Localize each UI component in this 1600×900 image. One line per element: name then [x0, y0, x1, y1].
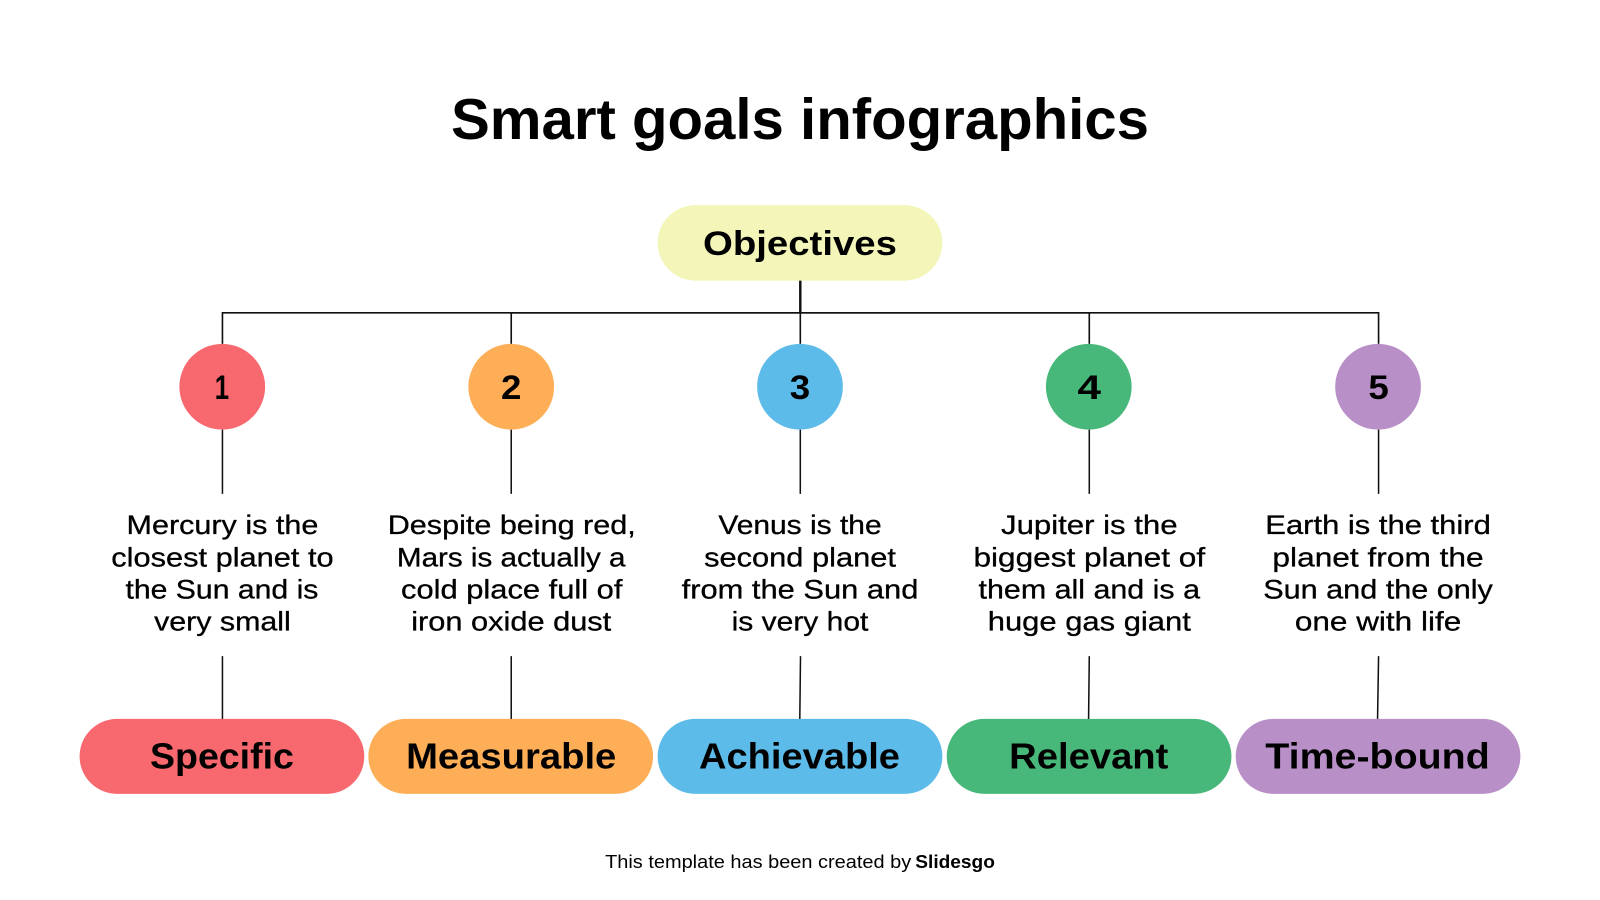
description 3: from the Sun and [682, 574, 918, 604]
description 4 [973, 510, 1206, 637]
description 3 [682, 510, 918, 637]
footer credit: This template has been created by [605, 851, 912, 872]
description 2 [388, 510, 636, 637]
number circle 4 [1046, 344, 1132, 430]
description 5: Sun and the only [1263, 574, 1493, 604]
description 2: cold place full of [401, 574, 623, 604]
description 1: very small [154, 607, 291, 637]
pill: specific: Specific [150, 735, 294, 776]
description 4: Jupiter is the [1001, 510, 1178, 540]
description 4: huge gas giant [988, 607, 1191, 637]
description 5: planet from the [1272, 542, 1484, 572]
pill: time-bound: Time-bound [1265, 735, 1490, 776]
number circle 3: 3 [790, 369, 810, 407]
description 5: one with life [1295, 607, 1461, 637]
pill: relevant: Relevant [1009, 735, 1168, 776]
connector lines 4 [1088, 430, 1090, 719]
column 3: achievable [658, 344, 942, 794]
connector lines 2 [510, 430, 512, 719]
description 3: Venus is the [718, 510, 882, 540]
title: Smart goals infographics [451, 88, 1149, 152]
description 1: the Sun and is [126, 574, 318, 604]
number circle 4: 4 [1078, 369, 1102, 407]
number circle 1: 1 [215, 369, 229, 407]
pill: specific [80, 719, 364, 794]
objectives pill: Objectives [703, 225, 897, 263]
description 2: Despite being red, [388, 510, 636, 540]
objectives pill [658, 205, 942, 281]
column 2: measurable [368, 344, 653, 794]
number circle 1 [179, 344, 265, 430]
description 5: Earth is the third [1265, 510, 1491, 540]
description 2: iron oxide dust [411, 607, 612, 637]
pill: time-bound [1236, 719, 1520, 794]
pill: measurable [368, 719, 653, 794]
description 1 [111, 510, 334, 637]
description 2: Mars is actually a [397, 542, 627, 572]
connector: trunk and horizontal bar [222, 281, 1379, 344]
column 5: time-bound [1236, 344, 1520, 794]
pill: achievable: Achievable [699, 735, 900, 776]
description 4: biggest planet of [973, 542, 1206, 572]
description 4: them all and is a [979, 574, 1201, 604]
description 3: second planet [704, 542, 896, 572]
description 1: closest planet to [111, 542, 334, 572]
number circle 2 [468, 344, 554, 430]
description 1: Mercury is the [127, 510, 318, 540]
number circle 5: 5 [1368, 369, 1389, 407]
column 1: specific [80, 344, 364, 794]
description 5 [1263, 510, 1493, 637]
connector lines 3 [799, 430, 802, 719]
footer credit: Slidesgo [915, 851, 995, 872]
number circle 2: 2 [501, 369, 521, 407]
description 3: is very hot [732, 607, 869, 637]
number circle 3 [757, 344, 843, 430]
number circle 5 [1335, 344, 1421, 430]
pill: measurable: Measurable [406, 735, 616, 776]
pill: relevant [947, 719, 1231, 794]
connector lines 1 [221, 430, 223, 719]
connector lines 5 [1378, 430, 1379, 719]
pill: achievable [658, 719, 942, 794]
column 4: relevant [947, 344, 1231, 794]
